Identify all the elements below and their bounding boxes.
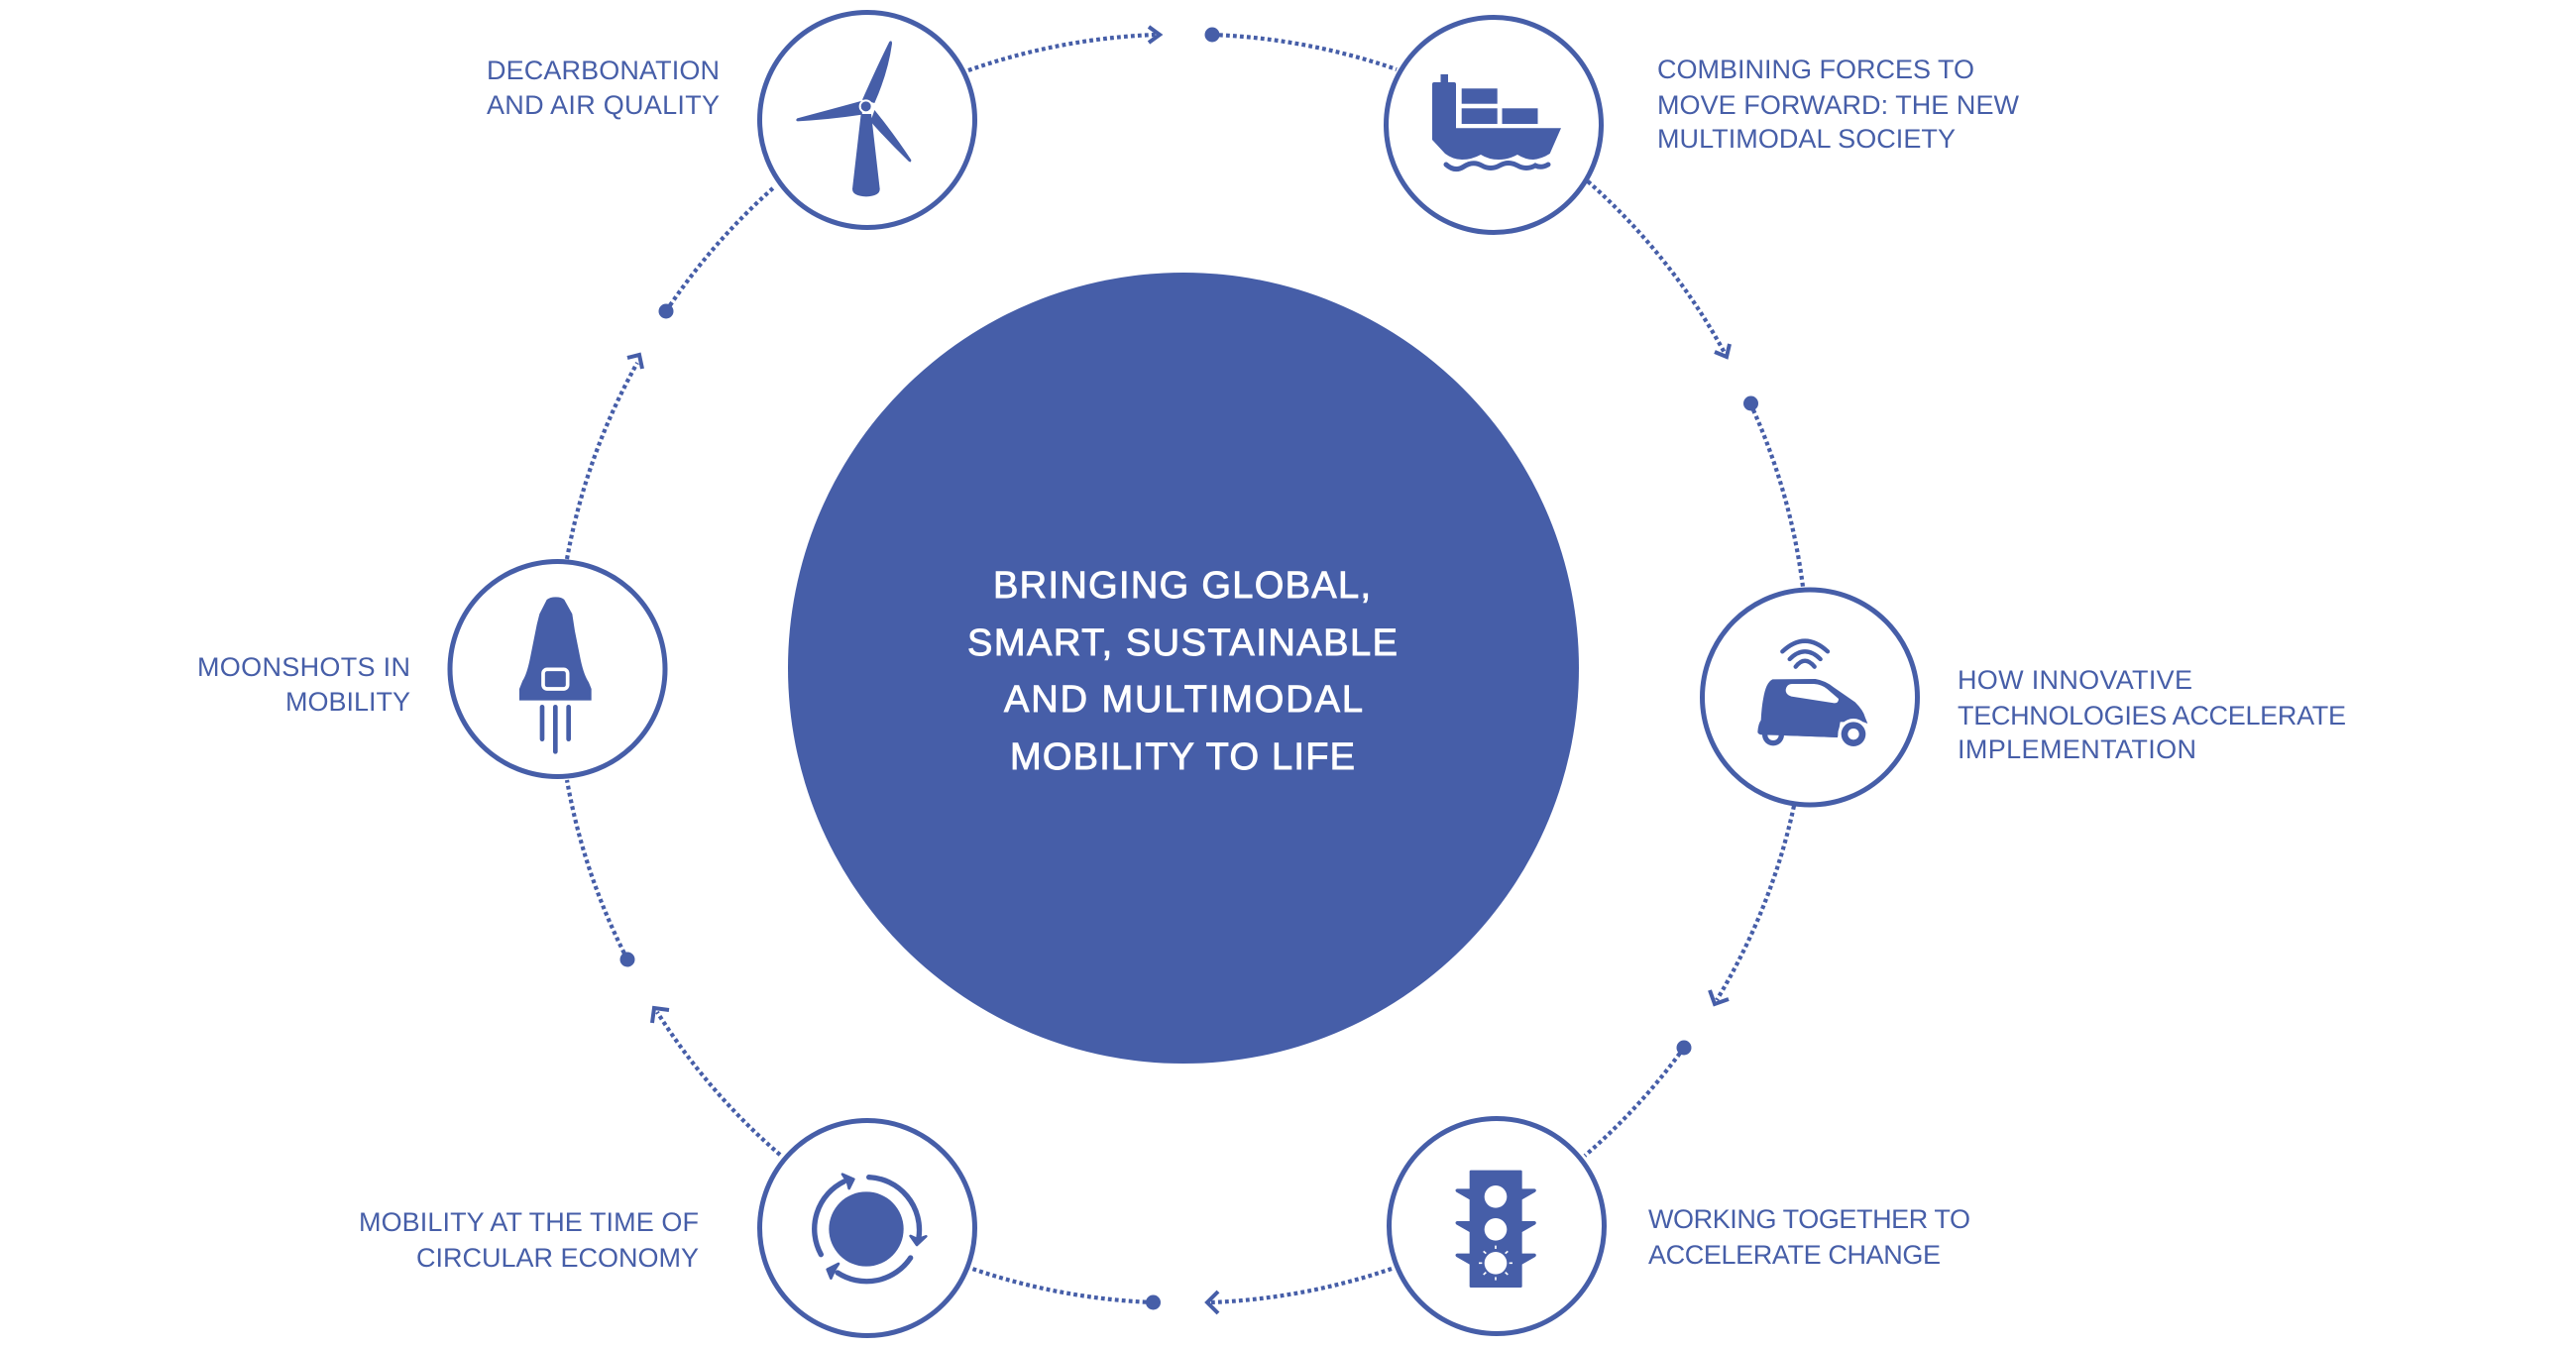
label: working together: WORKING TOGETHER TO — [1648, 1204, 1970, 1234]
label: circular economy: CIRCULAR ECONOMY — [416, 1243, 699, 1273]
arrow: moonshots to decarbonation — [567, 355, 642, 559]
icon: connected car — [1757, 641, 1869, 749]
arrow: combining forces to innovative technologies — [1588, 181, 1730, 357]
label: moonshots: MOONSHOTS IN — [197, 652, 410, 682]
label: decarbonation: DECARBONATION — [487, 56, 720, 85]
central title — [967, 565, 1398, 778]
connector: dot to innovative technologies — [1743, 396, 1803, 587]
label: combining forces: MOVE FORWARD: THE NEW — [1657, 90, 2020, 120]
label: combining forces — [1657, 55, 2020, 154]
label: circular economy — [359, 1207, 699, 1273]
label: innovative technologies — [1958, 665, 2346, 764]
node: combining forces circle — [1386, 18, 1602, 232]
icon: rocket — [519, 597, 592, 751]
central title: AND MULTIMODAL — [1004, 679, 1363, 721]
central title: SMART, SUSTAINABLE — [967, 622, 1398, 664]
label: moonshots — [197, 652, 410, 717]
label: combining forces: MULTIMODAL SOCIETY — [1657, 124, 1956, 154]
arrow: innovative technologies to working together — [1710, 806, 1794, 1004]
connector: dot to circular economy — [969, 1268, 1161, 1310]
label: innovative technologies: IMPLEMENTATION — [1958, 734, 2196, 764]
label: moonshots: MOBILITY — [285, 687, 410, 717]
icon: wind turbine — [796, 41, 911, 196]
icon: container ship — [1432, 74, 1561, 169]
connector: dot to combining forces — [1205, 28, 1397, 69]
label: working together: ACCELERATE CHANGE — [1648, 1240, 1941, 1270]
central title: BRINGING GLOBAL, — [993, 565, 1371, 607]
arrow: decarbonation to combining forces — [968, 27, 1160, 70]
connector: dot to decarbonation — [658, 186, 775, 319]
label: combining forces: COMBINING FORCES TO — [1657, 55, 1974, 84]
icon: circular economy arrows — [815, 1175, 926, 1282]
node: circular economy circle — [759, 1120, 975, 1336]
label: circular economy: MOBILITY AT THE TIME OF — [359, 1207, 699, 1237]
arrow: working together to circular economy — [1207, 1269, 1392, 1313]
label: decarbonation — [487, 56, 720, 120]
arrow: circular economy to moonshots — [652, 1008, 780, 1155]
node: decarbonation circle — [759, 12, 975, 228]
node: working together circle — [1390, 1118, 1604, 1334]
label: decarbonation: AND AIR QUALITY — [487, 90, 720, 120]
node: moonshots circle — [450, 561, 665, 777]
label: innovative technologies: TECHNOLOGIES ACCELERATE — [1958, 701, 2346, 731]
connector: dot to moonshots — [567, 780, 634, 967]
node: innovative technologies circle — [1703, 590, 1917, 805]
label: working together — [1648, 1204, 1970, 1270]
central title: MOBILITY TO LIFE — [1010, 736, 1355, 778]
label: innovative technologies: HOW INNOVATIVE — [1958, 665, 2192, 695]
central circle — [788, 273, 1579, 1064]
icon: traffic light — [1455, 1171, 1536, 1288]
connector: dot to working together — [1585, 1041, 1691, 1156]
